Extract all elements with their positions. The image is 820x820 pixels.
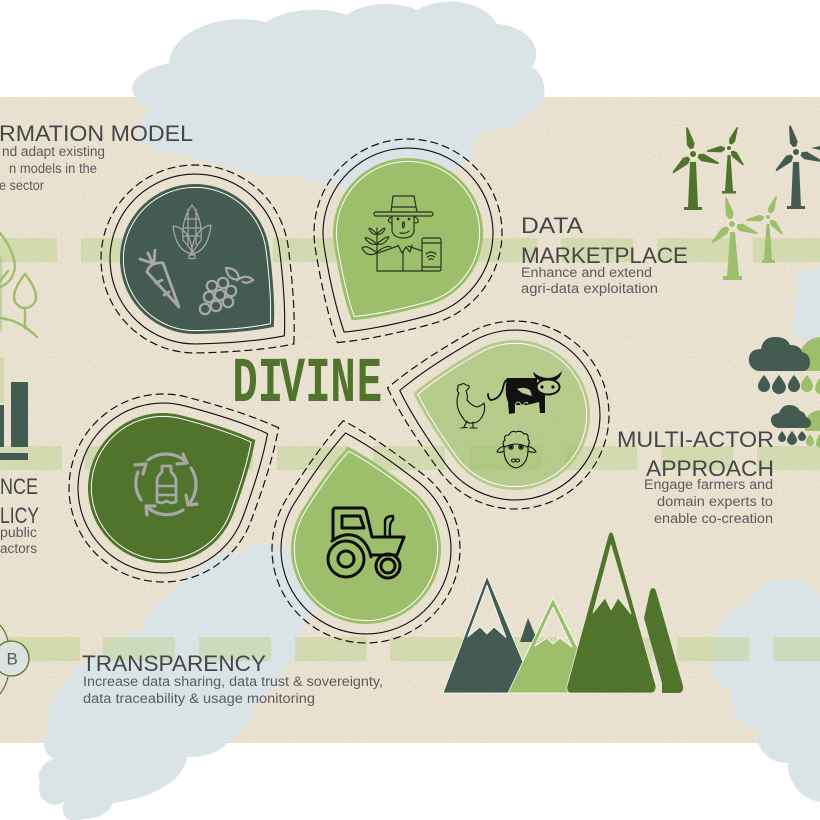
- title: DIVINE: DIVINE: [232, 349, 382, 421]
- icon: tractor: [328, 508, 404, 578]
- text: multi-actor approach: domain experts to: [657, 494, 773, 509]
- turbine 3: [773, 124, 820, 209]
- text: multi-actor approach: MULTI-ACTOR: [617, 427, 774, 452]
- text: transparency: [82, 651, 383, 706]
- text: data marketplace: MARKETPLACE: [521, 243, 688, 268]
- turbine 2: [706, 126, 746, 194]
- text: policy block: [0, 474, 39, 556]
- text: transformation model: n models in the: [9, 161, 97, 176]
- text: data marketplace: agri-data exploitation: [521, 281, 658, 296]
- drop: recycling: [36, 344, 322, 615]
- mountain 2: [508, 598, 600, 693]
- cloud: upper right: [793, 268, 820, 350]
- drop: tractor: [251, 404, 475, 658]
- text: policy block: actors: [0, 541, 37, 556]
- text: data marketplace: Enhance and extend: [521, 265, 652, 280]
- text: transparency: TRANSPARENCY: [82, 651, 266, 676]
- textured paper background: [0, 97, 820, 743]
- cloud: top: [132, 2, 544, 195]
- turbine 1: [670, 126, 720, 210]
- text: transformation model: nd adapt existing: [2, 144, 105, 159]
- icons: wind turbines: [670, 124, 820, 280]
- drop: data marketplace: [258, 103, 538, 393]
- icon: circle B: B: [6, 650, 18, 668]
- dashed green bands: [0, 238, 820, 661]
- icon: recycled bottle: [135, 454, 197, 515]
- text: multi-actor approach: APPROACH: [646, 456, 774, 481]
- text: transparency: data traceability & usage monitoring: [83, 691, 315, 706]
- text: transparency: Increase data sharing, data trust & sovereignty,: [83, 674, 383, 689]
- icon: sheep: [497, 431, 536, 468]
- icon: trees: [0, 233, 37, 337]
- mountain 4: [644, 588, 683, 693]
- back peak: [520, 618, 538, 642]
- icon: mountains: [443, 532, 683, 693]
- turbine 5: [745, 195, 785, 263]
- text: policy block: NCE: [0, 474, 38, 499]
- text: transformation model: [0, 121, 193, 193]
- text: transformation model: RMATION MODEL: [0, 121, 193, 146]
- mountain 1: [443, 576, 536, 693]
- text: policy block: LICY: [0, 503, 39, 528]
- icon: circle B: [0, 625, 29, 694]
- mountain 3: [567, 532, 656, 693]
- drop: transformation model: [62, 126, 355, 415]
- text: multi-actor approach: Engage farmers and: [644, 477, 773, 492]
- icon: cow: [488, 371, 562, 414]
- icon: grapes: [200, 268, 253, 314]
- text: transformation model: e sector: [0, 178, 44, 193]
- text: multi-actor approach: [617, 427, 774, 526]
- icon: farmer: [362, 196, 441, 271]
- cloud: bottom left: [39, 543, 316, 820]
- icon: chicken: [457, 384, 485, 428]
- icon: carrot: [140, 250, 179, 307]
- text: multi-actor approach: enable co-creation: [654, 511, 773, 526]
- icons: rain clouds: [749, 337, 820, 448]
- turbine 4: [709, 196, 759, 280]
- text: policy block: public: [0, 525, 37, 540]
- drop: multi-actor: [368, 296, 626, 526]
- text: data marketplace: [521, 213, 688, 296]
- cloud: bottom right: [712, 579, 820, 802]
- text: data marketplace: DATA: [521, 213, 583, 238]
- icon: bar chart: [0, 357, 28, 460]
- icon: corn: [173, 205, 211, 258]
